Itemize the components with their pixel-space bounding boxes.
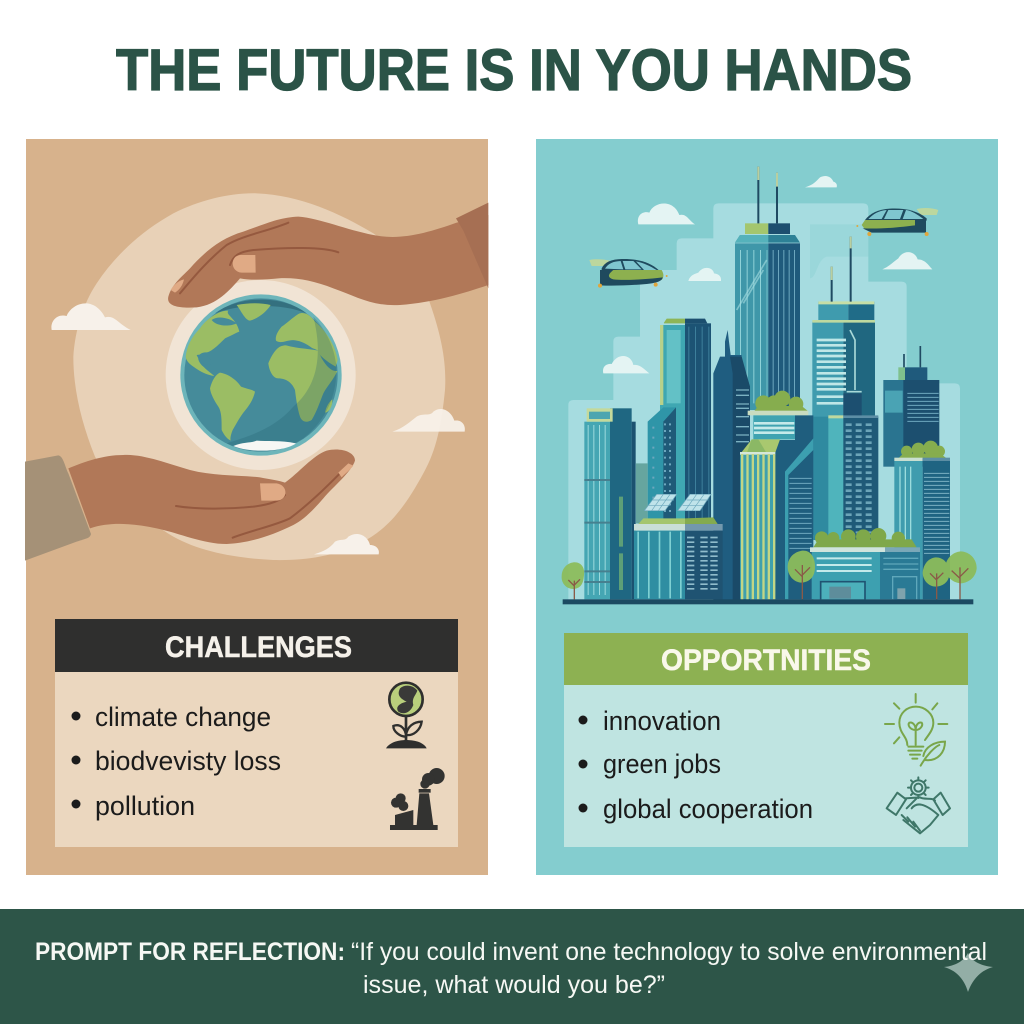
solar panels [644, 494, 711, 511]
list: opportunities [578, 706, 813, 824]
cloud group [603, 176, 932, 373]
illustration: green city [562, 167, 977, 604]
list: challenges: pollution [95, 791, 195, 821]
right tower [812, 237, 875, 535]
low left building with green roof [634, 517, 723, 599]
planter building [748, 391, 813, 599]
upper hand [168, 203, 488, 308]
left middle tower [660, 319, 711, 532]
globe [180, 294, 342, 456]
list: challenges: biodvevisty loss [95, 746, 281, 776]
night shadow [227, 317, 336, 450]
continents [186, 303, 338, 441]
panel: challenges [25, 139, 488, 875]
card: challenges [55, 619, 458, 847]
illustration: hands holding earth [25, 193, 488, 561]
far right building [883, 346, 939, 467]
heading: opportunities: OPPORTNITIES [661, 644, 871, 677]
list: opportunities: global cooperation [603, 794, 813, 824]
right middle building [813, 415, 878, 540]
central tower [735, 167, 800, 410]
reflection prompt: issue, what would you be?” [363, 971, 665, 999]
card: opportunities [564, 633, 968, 847]
icon: plant globe [386, 683, 427, 748]
ground line [563, 599, 973, 604]
clouds [51, 303, 465, 554]
reflection prompt: “If you could invent one technology to solve environmental [351, 938, 987, 966]
reflection prompt [35, 938, 987, 999]
inland seas [197, 318, 318, 365]
footer banner [0, 909, 1024, 1024]
flying car right [856, 208, 938, 236]
title: THE FUTURE IS IN YOU HANDS [116, 38, 912, 103]
icon: factory [390, 768, 445, 830]
trees [562, 551, 977, 599]
reflection prompt: PROMPT FOR REFLECTION: [35, 938, 345, 966]
striped front building [740, 439, 780, 599]
heading: challenges: CHALLENGES [165, 631, 352, 664]
list: opportunities: green jobs [603, 749, 721, 779]
panel: opportunities [536, 139, 998, 875]
list: challenges [72, 702, 281, 821]
sparkle icon [944, 953, 993, 992]
icon: handshake with gear [887, 777, 950, 833]
flying car left [589, 259, 668, 288]
icon: light bulb with leaf [885, 694, 947, 766]
low right building with green roof [810, 528, 920, 599]
list: challenges: climate change [95, 702, 271, 732]
lower hand [25, 450, 355, 561]
glow around globe [166, 280, 356, 470]
left building [584, 408, 636, 599]
small mid-left building [636, 407, 676, 523]
center spire building [713, 330, 750, 600]
right front building [894, 441, 950, 599]
list: opportunities: innovation [603, 706, 721, 736]
